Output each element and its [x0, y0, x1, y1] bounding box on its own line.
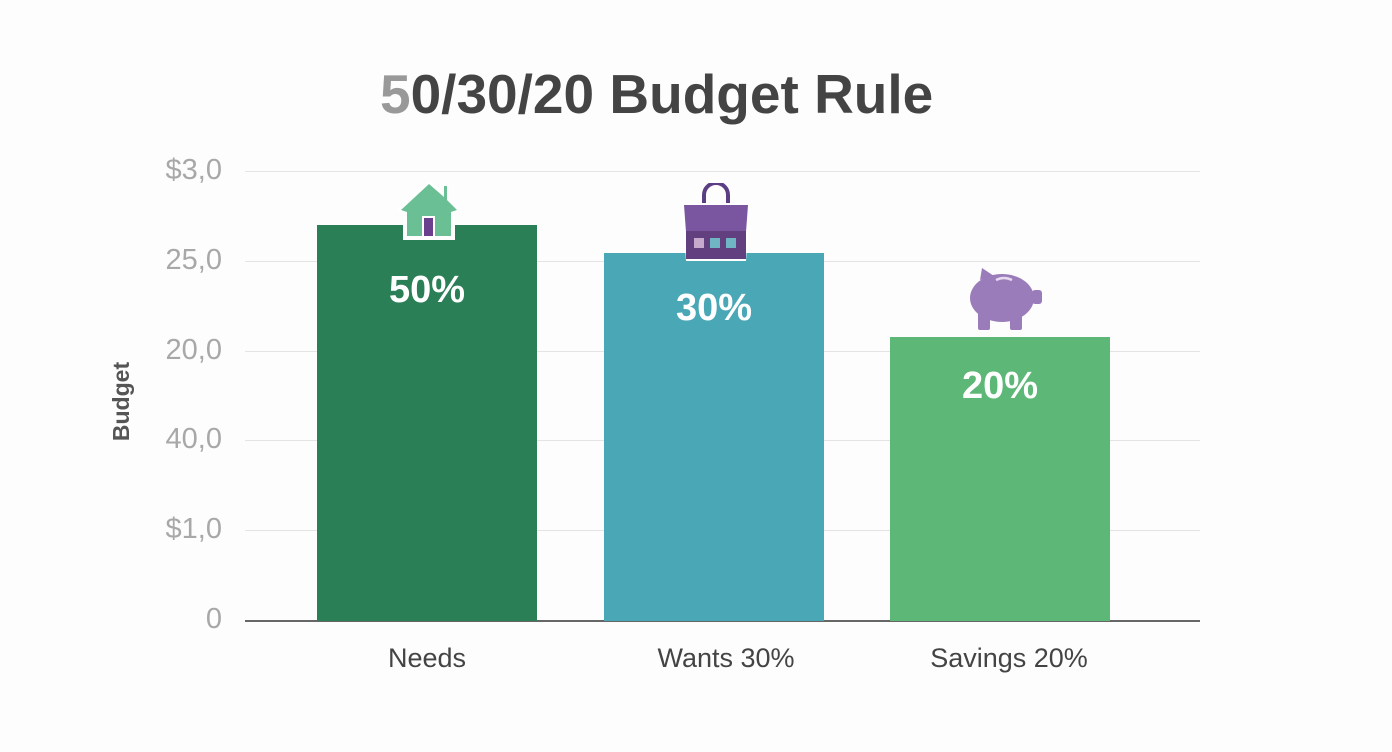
title: 50/30/20 Budget Rule: [380, 63, 933, 125]
y-axis title: Budget: [108, 362, 134, 441]
icon: shopping bag: [684, 183, 748, 261]
category labels: Needs: [388, 643, 466, 673]
y-axis ticks: 25,0: [166, 244, 222, 276]
y-axis ticks: 40,0: [166, 423, 222, 455]
bar: wants: [604, 253, 824, 621]
y-axis ticks: [166, 154, 222, 635]
bar: needs: [317, 225, 537, 621]
bar: savings: [890, 337, 1110, 621]
icon: house: [401, 184, 457, 240]
category labels: Wants 30%: [657, 643, 795, 673]
y-axis ticks: 0: [206, 603, 222, 635]
category labels: Savings 20%: [930, 643, 1088, 673]
category labels: [388, 643, 1088, 673]
y-axis ticks: 20,0: [166, 334, 222, 366]
bar: needs: 50%: [389, 269, 465, 311]
icon: piggy bank: [970, 268, 1042, 330]
bar: wants: 30%: [676, 287, 752, 329]
y-axis ticks: $1,0: [166, 513, 222, 545]
bar: savings: 20%: [962, 365, 1038, 407]
y-axis ticks: $3,0: [166, 154, 222, 186]
